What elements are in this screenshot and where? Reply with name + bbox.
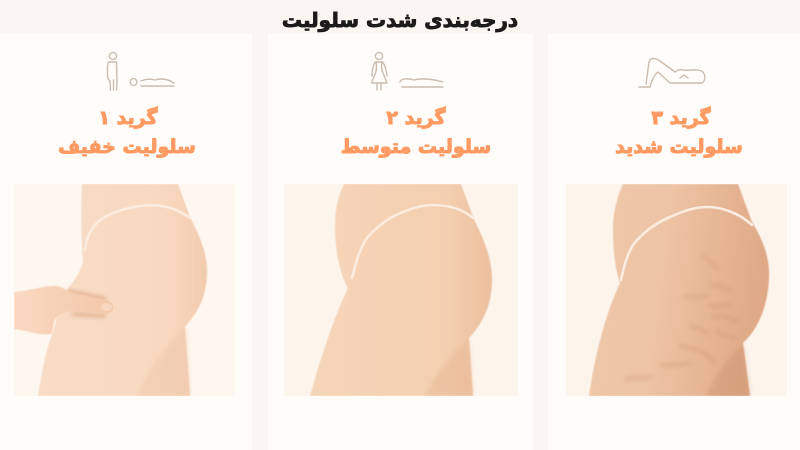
- figure body: [589, 184, 769, 396]
- hand: [14, 286, 113, 334]
- image: thigh with moderate cellulite: [284, 184, 518, 396]
- underwear line: [621, 207, 752, 280]
- icon: standing man and lying figure: [107, 52, 174, 90]
- image: thigh with pinching hand: [14, 184, 235, 396]
- back leg shade: [138, 328, 190, 396]
- subheading: moderate cellulite: سلولیت متوسط: [341, 136, 491, 158]
- cellulite dimples: [626, 256, 722, 381]
- hand shadow: [68, 291, 106, 316]
- heading: grade 3: گرید ۳: [651, 106, 712, 129]
- title: درجه‌بندی شدت سلولیت: [282, 8, 518, 32]
- panel: grade 3: [588, 58, 770, 396]
- heading: grade 2: گرید ۲: [386, 106, 447, 129]
- back leg shade: [707, 344, 750, 396]
- heading: grade 1: گرید ۱: [98, 106, 159, 129]
- image: thigh with severe cellulite: [566, 184, 787, 396]
- subheading: severe cellulite: سلولیت شدید: [615, 136, 743, 158]
- back leg shade: [425, 339, 473, 396]
- panel: grade 2: [310, 52, 493, 396]
- figure body: [310, 184, 492, 396]
- subheading: mild cellulite: سلولیت خفیف: [58, 136, 196, 158]
- underwear line: [352, 205, 473, 278]
- icon: bridge pose figure: [639, 58, 705, 87]
- underwear line: [85, 205, 190, 250]
- panel: grade 1: [14, 52, 208, 396]
- icon: standing woman and lying figure: [372, 52, 443, 90]
- figure body: [38, 184, 207, 396]
